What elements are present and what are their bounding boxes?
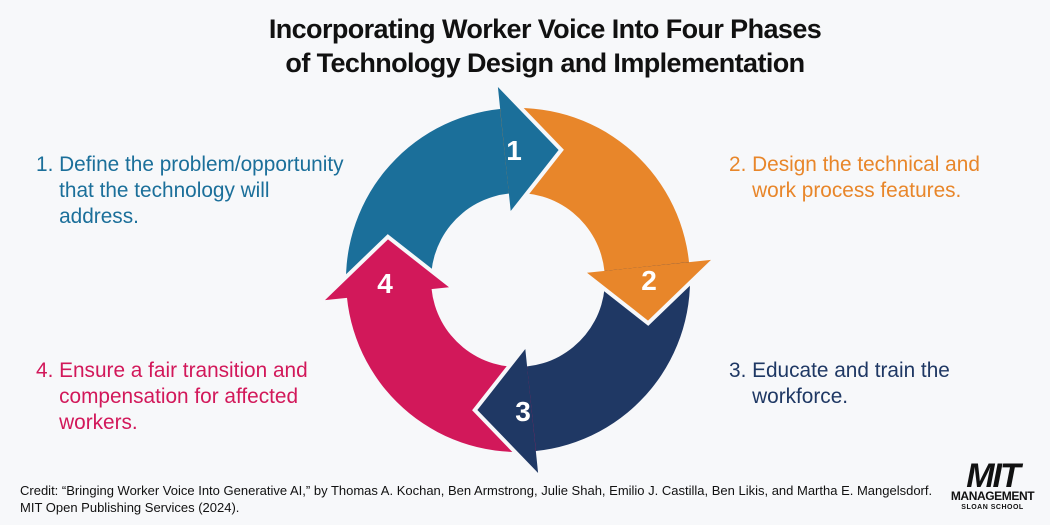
text: phase 3 bbox=[729, 359, 950, 408]
title: of Technology Design and Implementation bbox=[285, 48, 805, 78]
text: phase 2: 2. Design the technical and bbox=[729, 153, 980, 176]
text: phase 3: workforce. bbox=[752, 385, 848, 408]
logo bbox=[951, 457, 1034, 511]
title: Incorporating Worker Voice Into Four Phases bbox=[269, 14, 821, 44]
text: phase 2 bbox=[729, 153, 980, 202]
credit: MIT Open Publishing Services (2024). bbox=[20, 500, 239, 515]
text: phase 1 bbox=[36, 153, 344, 228]
logo: MANAGEMENT bbox=[951, 489, 1034, 503]
logo: SLOAN SCHOOL bbox=[961, 504, 1024, 511]
credit bbox=[20, 483, 932, 515]
text: phase 4: workers. bbox=[59, 411, 138, 434]
text: phase 3: 3. Educate and train the bbox=[729, 359, 950, 382]
text: phase 4: compensation for affected bbox=[59, 385, 298, 408]
text: phase 2: work process features. bbox=[752, 179, 961, 202]
logo: MIT bbox=[966, 457, 1019, 495]
cycle diagram: 4 bbox=[377, 268, 393, 299]
text: phase 4: 4. Ensure a fair transition and bbox=[36, 359, 308, 382]
text: phase 1: 1. Define the problem/opportunity bbox=[36, 153, 344, 176]
credit: Credit: “Bringing Worker Voice Into Generative AI,” by Thomas A. Kochan, Ben Armstrong, Julie Shah, Emilio J. Castilla, Ben Likis, and Martha E. Mangelsdorf. bbox=[20, 483, 932, 498]
cycle diagram: 3 bbox=[515, 396, 531, 427]
text: phase 4 bbox=[36, 359, 308, 434]
text: phase 1: that the technology will bbox=[59, 179, 270, 202]
title bbox=[269, 14, 821, 78]
cycle diagram: 1 bbox=[506, 135, 522, 166]
text: phase 1: address. bbox=[59, 205, 139, 228]
cycle diagram: 2 bbox=[641, 265, 657, 296]
